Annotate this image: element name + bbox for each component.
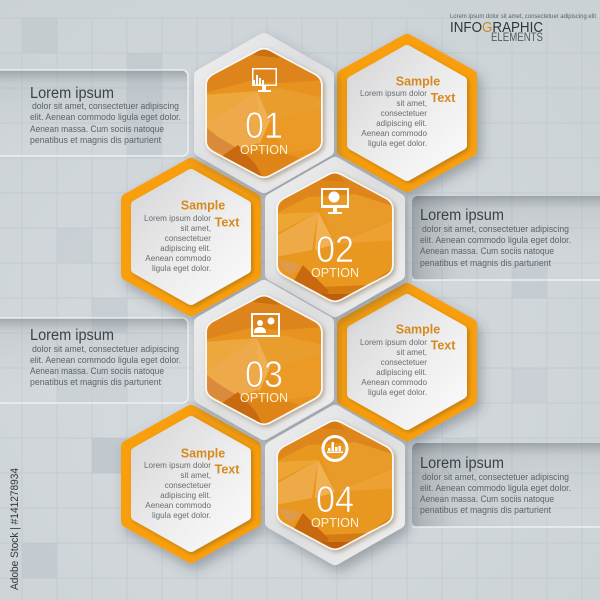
text block: left 1: penatibus et magnis dis parturient: [30, 135, 161, 145]
text block: sample A: Aenean commodo: [361, 129, 427, 138]
text block: left 1: elit. Aenean commodo ligula eget dolor.: [30, 112, 181, 122]
text block: left 2: penatibus et magnis dis parturient: [30, 377, 161, 387]
option hexagon 02: [272, 164, 398, 310]
title block: INFOGRAPHIC: [450, 19, 543, 36]
title block: [450, 13, 596, 44]
title block: ELEMENTS: [491, 32, 543, 44]
text block: left 1: [30, 101, 181, 145]
stock id label: Adobe Stock | #141278934: [9, 468, 21, 590]
text block: right 2: Aenean massa. Cum sociis natoque: [420, 494, 554, 504]
text block: sample D: consectetuer: [165, 481, 211, 490]
text block: sample B: [144, 214, 211, 273]
heading: sample C: Text: [431, 338, 456, 352]
text block: right 1: elit. Aenean commodo ligula eget dolor.: [420, 235, 571, 245]
heading: sample C: Sample: [396, 322, 440, 336]
sample hexagon D: [128, 412, 254, 556]
text block: sample C: Aenean commodo: [361, 378, 427, 387]
text block: sample B: consectetuer: [165, 234, 211, 243]
text block: sample B: Lorem ipsum dolor: [144, 214, 211, 223]
text block: right 2: penatibus et magnis dis parturient: [420, 505, 551, 515]
heading: sample D: Sample: [181, 446, 225, 460]
number 02: 02: [316, 229, 354, 270]
heading: right 1: Lorem ipsum: [420, 207, 504, 224]
text block: left 2: elit. Aenean commodo ligula eget dolor.: [30, 355, 181, 365]
panel: left text 2: [0, 318, 188, 403]
text block: sample A: adipiscing elit.: [376, 119, 427, 128]
text block: left 2: [30, 344, 181, 387]
option hexagon 01: [201, 40, 327, 186]
heading: sample D: Text: [215, 462, 240, 476]
icon: circular chart: [322, 435, 349, 462]
heading: right 2: Lorem ipsum: [420, 455, 504, 472]
text block: left 2: Aenean massa. Cum sociis natoque: [30, 366, 164, 376]
text block: sample D: [144, 461, 211, 520]
sample hexagon C: [344, 290, 470, 434]
number 03: 03: [245, 354, 283, 395]
text block: right 2: [420, 472, 571, 515]
number 01: 01: [245, 105, 283, 146]
icon: presentation board: [251, 313, 280, 337]
heading: sample D: [181, 446, 240, 476]
label option: OPTION: [311, 516, 359, 530]
heading: left 2: Lorem ipsum: [30, 327, 114, 344]
sample hexagon B: [128, 165, 254, 309]
text block: right 1: penatibus et magnis dis parturient: [420, 258, 551, 268]
text block: left 1: dolor sit amet, consectetuer adipiscing: [32, 101, 179, 111]
text block: right 1: [420, 224, 571, 268]
text block: left 1: Aenean massa. Cum sociis natoque: [30, 124, 164, 134]
title block: Lorem ipsum dolor sit amet, consectetuer adipiscing elit: [450, 13, 596, 20]
text block: right 1: Aenean massa. Cum sociis natoque: [420, 246, 554, 256]
icon: monitor with bars: [252, 68, 277, 92]
heading: sample A: [396, 74, 456, 105]
text block: sample B: ligula eget dolor.: [152, 264, 211, 273]
text block: right 2: dolor sit amet, consectetuer adipiscing: [422, 472, 569, 482]
sample hexagon A: [344, 41, 470, 185]
text block: sample D: sit amet,: [180, 471, 211, 480]
text block: sample D: ligula eget dolor.: [152, 511, 211, 520]
heading: sample B: [181, 198, 240, 230]
panel: right text 2: [412, 443, 600, 527]
text block: sample B: adipiscing elit.: [160, 244, 211, 253]
option hexagon 04: [272, 412, 398, 558]
text block: sample C: consectetuer: [381, 358, 427, 367]
text block: sample C: adipiscing elit.: [376, 368, 427, 377]
text block: sample A: ligula eget dolor.: [368, 139, 427, 148]
text block: right 2: elit. Aenean commodo ligula eget dolor.: [420, 483, 571, 493]
text block: sample C: sit amet,: [396, 348, 427, 357]
label option: OPTION: [240, 143, 288, 157]
text block: sample A: [360, 89, 427, 148]
text block: sample A: consectetuer: [381, 109, 427, 118]
label option: OPTION: [311, 266, 359, 280]
text block: left 2: dolor sit amet, consectetuer adipiscing: [32, 344, 179, 354]
text block: sample C: [360, 338, 427, 397]
text block: sample D: adipiscing elit.: [160, 491, 211, 500]
heading: sample A: Text: [431, 91, 456, 105]
text block: sample D: Lorem ipsum dolor: [144, 461, 211, 470]
heading: sample C: [396, 322, 456, 352]
heading: sample A: Sample: [396, 74, 440, 88]
heading: sample B: Sample: [181, 198, 225, 212]
text block: sample A: sit amet,: [396, 99, 427, 108]
heading: sample B: Text: [215, 216, 240, 230]
text block: sample B: Aenean commodo: [145, 254, 211, 263]
text block: right 1: dolor sit amet, consectetuer adipiscing: [422, 224, 569, 234]
text block: sample C: ligula eget dolor.: [368, 388, 427, 397]
icon: monitor with pie: [321, 188, 349, 214]
number 04: 04: [316, 479, 354, 520]
panel: right text 1: [412, 196, 600, 280]
text block: sample B: sit amet,: [180, 224, 211, 233]
text block: sample D: Aenean commodo: [145, 501, 211, 510]
panel: left text 1: [0, 70, 188, 156]
label option: OPTION: [240, 391, 288, 405]
heading: left 1: Lorem ipsum: [30, 85, 114, 102]
text block: sample C: Lorem ipsum dolor: [360, 338, 427, 347]
option hexagon 03: [201, 287, 327, 433]
text block: sample A: Lorem ipsum dolor: [360, 89, 427, 98]
